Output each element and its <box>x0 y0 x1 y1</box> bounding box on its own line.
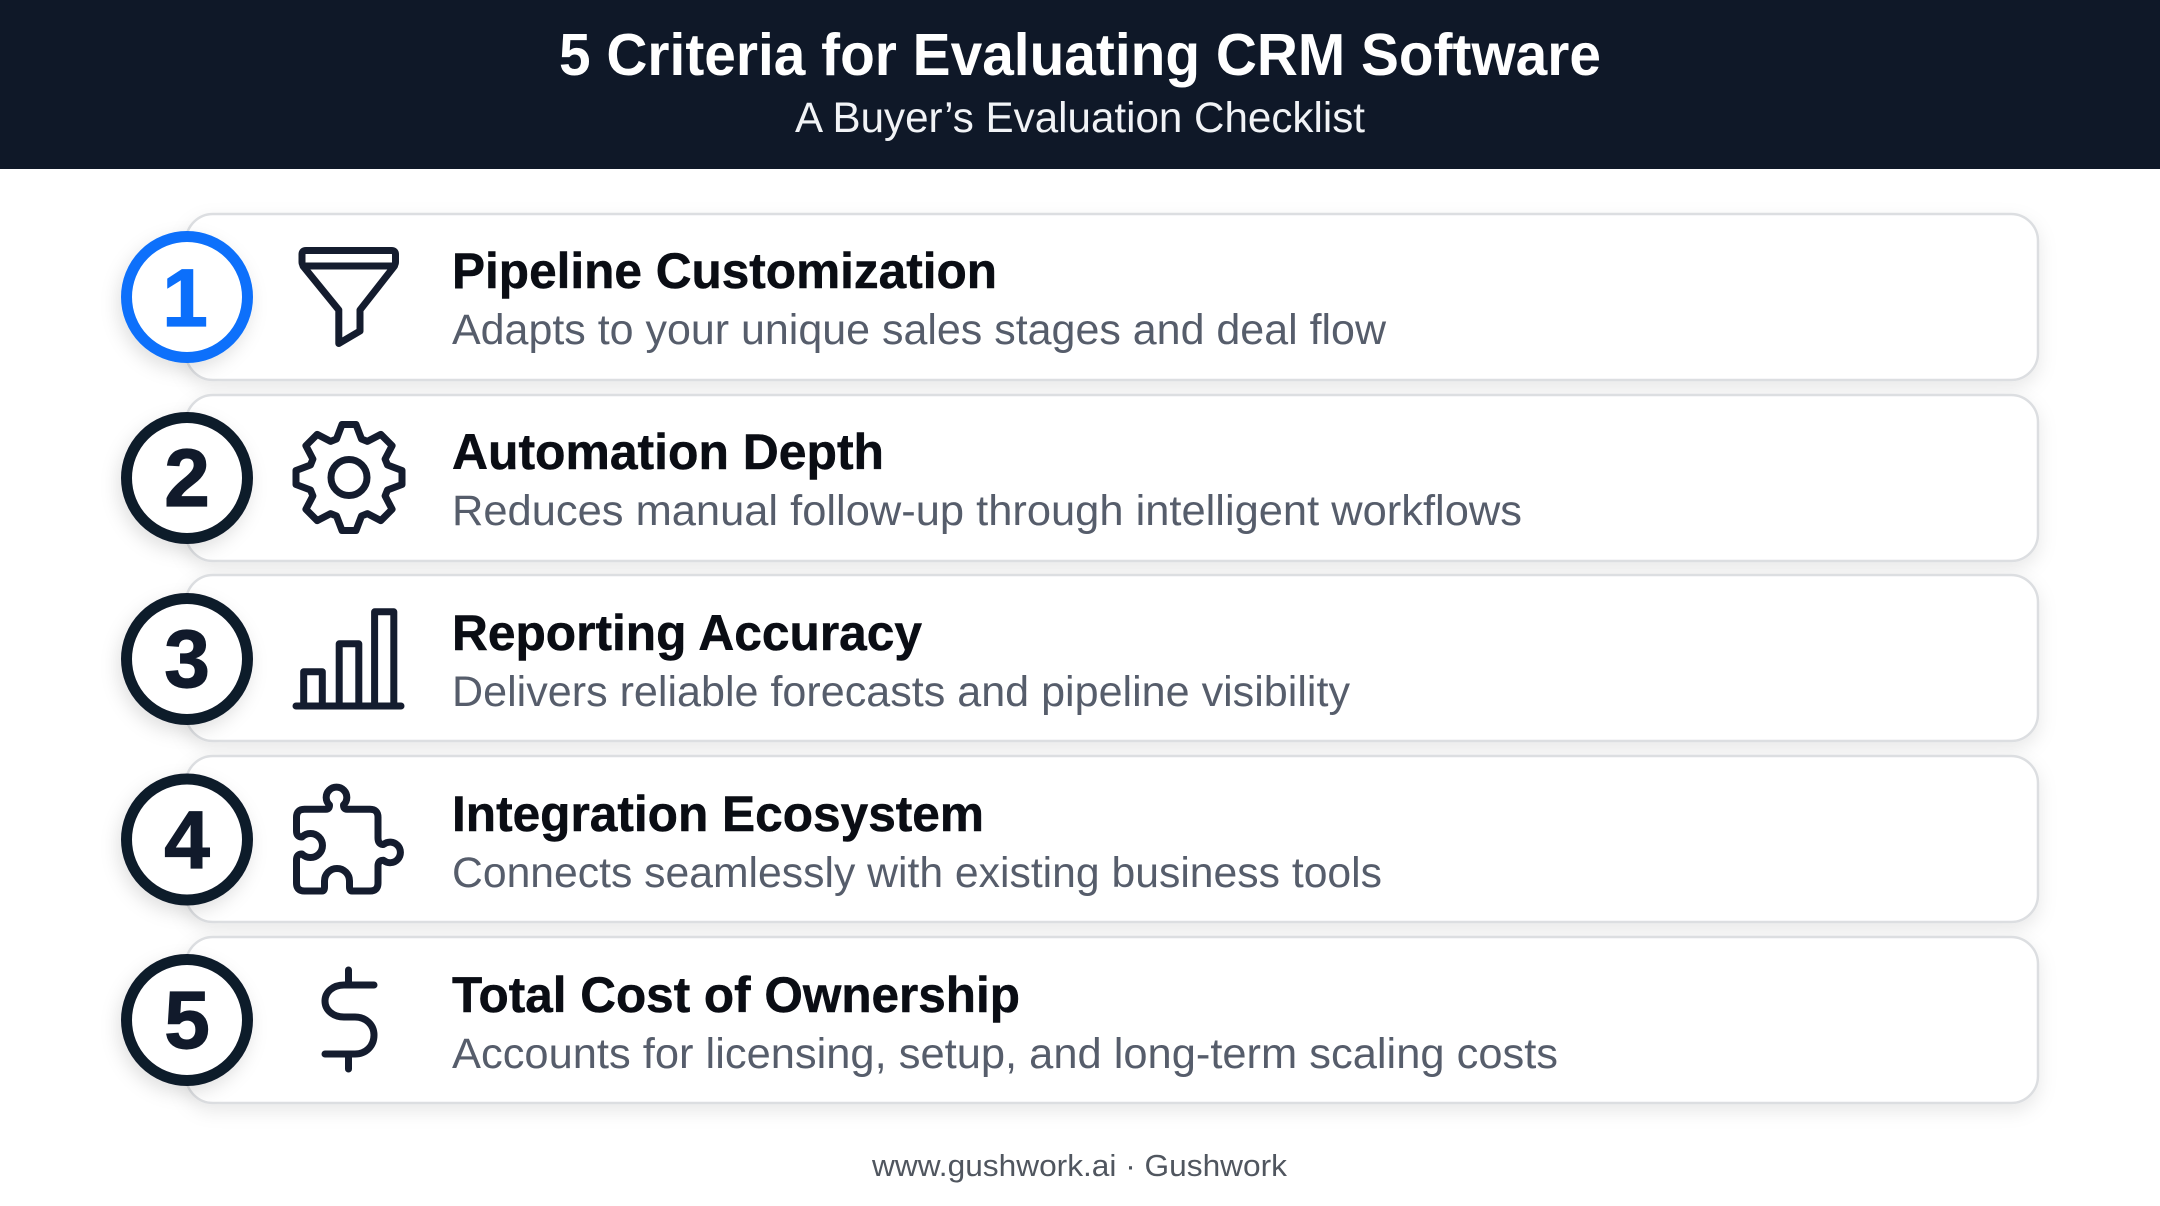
panel: criterion 2 <box>126 395 2038 561</box>
number badge 4 <box>126 779 248 900</box>
description: Adapts to your unique sales stages and deal flow <box>452 306 1387 354</box>
number badge 3: 3 <box>164 614 210 705</box>
number badge 2: 2 <box>164 433 210 524</box>
panel: criterion 1 <box>126 214 2038 380</box>
heading: Integration Ecosystem: Integration Ecosystem <box>452 786 984 842</box>
header band <box>0 0 2160 169</box>
heading: Pipeline Customization: Pipeline Customization <box>452 243 997 299</box>
subtitle: A Buyer’s Evaluation Checklist <box>795 94 1365 142</box>
icon: dollar sign <box>325 970 374 1069</box>
panel: criterion 4 <box>126 756 2038 922</box>
footer: www.gushwork.ai · Gushwork <box>871 1148 1288 1183</box>
description: Delivers reliable forecasts and pipeline visibility <box>452 668 1350 716</box>
description: Connects seamlessly with existing business tools <box>452 849 1382 897</box>
number badge 2 <box>126 418 248 538</box>
number badge 1 <box>126 236 248 358</box>
heading: Reporting Accuracy: Reporting Accuracy <box>452 605 922 661</box>
icon: gear <box>296 424 402 530</box>
icon: funnel <box>302 250 396 344</box>
icon: bar chart <box>296 612 401 706</box>
heading: Automation Depth: Automation Depth <box>452 424 884 480</box>
panel: criterion 3 <box>126 575 2038 741</box>
icon: puzzle piece <box>296 787 400 891</box>
title: 5 Criteria for Evaluating CRM Software <box>559 22 1601 88</box>
number badge 4: 4 <box>164 795 210 886</box>
panel: criterion 5 <box>126 937 2038 1103</box>
number badge 5: 5 <box>164 975 210 1066</box>
number badge 3 <box>126 598 248 720</box>
number badge 5 <box>126 960 248 1080</box>
number badge 1: 1 <box>162 253 208 344</box>
heading: Total Cost of Ownership: Total Cost of Ownership <box>452 967 1020 1023</box>
description: Accounts for licensing, setup, and long-term scaling costs <box>452 1030 1558 1078</box>
description: Reduces manual follow-up through intelligent workflows <box>452 487 1522 535</box>
